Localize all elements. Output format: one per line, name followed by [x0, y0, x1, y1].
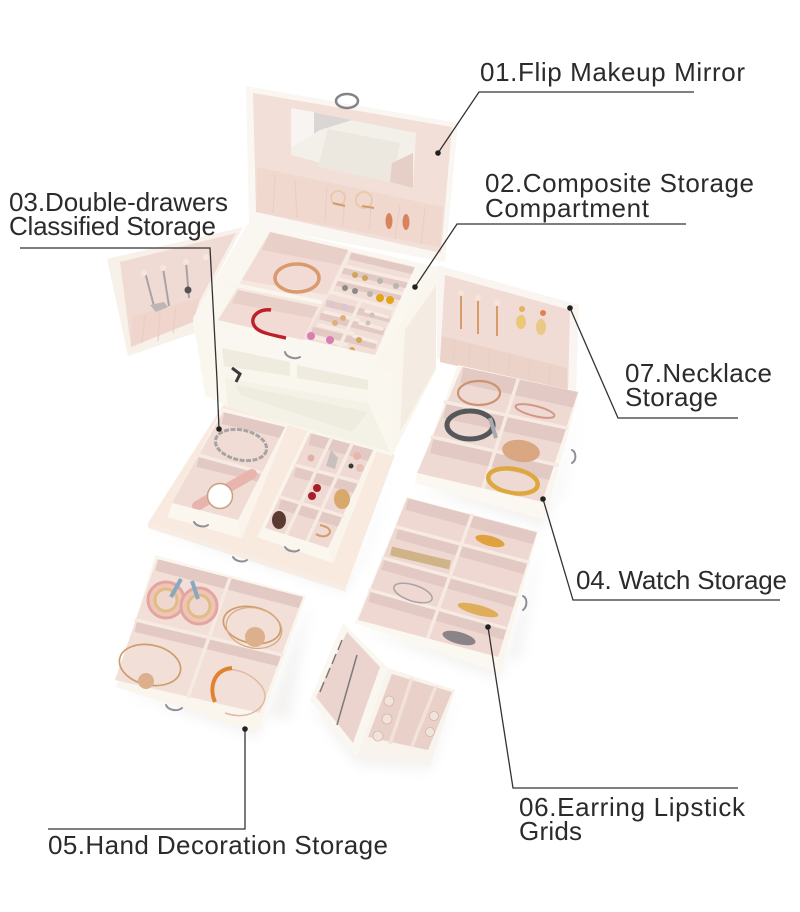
tray front	[415, 473, 545, 520]
tray front	[355, 620, 500, 673]
disc bangle bottom left	[116, 639, 184, 691]
grey watch	[447, 411, 496, 439]
earring lipstick box	[310, 623, 455, 765]
door hanging jewelry	[141, 254, 209, 312]
label 05 hand decoration storage	[48, 726, 388, 860]
label 02 composite storage compartment	[412, 168, 754, 290]
label 01 flip makeup mirror: 01.Flip Makeup Mirror	[480, 57, 745, 87]
pink strap watch	[197, 474, 252, 508]
left small drawer: watch storage	[167, 408, 288, 538]
pocket earrings	[331, 191, 410, 230]
red bracelet compartment	[218, 290, 318, 340]
soft shadows under the trays	[120, 400, 580, 770]
tray 05: four compartment hand decoration tray	[115, 555, 306, 733]
tray 04: six compartment watch tray	[415, 365, 579, 520]
lid clasp	[336, 94, 358, 108]
right door: necklace storage panel	[437, 265, 579, 392]
door pleated pocket	[131, 298, 200, 347]
bangle	[458, 381, 500, 405]
tray handle	[572, 450, 575, 463]
label 07 necklace storage: Storage	[625, 382, 718, 412]
small drawer front	[168, 503, 240, 538]
open cavity	[225, 378, 390, 452]
upper shelf slots	[222, 348, 290, 376]
label 05 hand decoration storage: 05.Hand Decoration Storage	[48, 830, 388, 860]
pearl earrings	[373, 696, 438, 741]
drawer front	[257, 528, 333, 563]
gold disc	[501, 437, 541, 465]
label 06 earring lipstick grids: 06.Earring Lipstick	[519, 792, 746, 822]
earring and ring grid	[303, 252, 415, 355]
leaf pin	[441, 628, 477, 648]
silver bangle	[392, 579, 434, 607]
lid pleated pocket	[256, 167, 443, 247]
mirror	[291, 108, 416, 188]
tray handle	[523, 596, 526, 610]
white strap	[220, 282, 320, 302]
label 02 composite storage compartment: Compartment	[485, 193, 650, 223]
silver bracelet	[212, 425, 270, 465]
left door: necklace hooks panel	[107, 227, 243, 356]
label 07 necklace storage	[567, 305, 772, 418]
lid hanging pieces	[320, 640, 357, 725]
door hanging earrings	[458, 290, 546, 336]
round drop earrings	[148, 579, 217, 624]
label 01 flip makeup mirror	[435, 57, 745, 156]
label 03 double drawers classified storage	[9, 187, 228, 432]
base drawer with pink lining	[148, 402, 395, 592]
door pleated pocket	[440, 336, 567, 392]
base drawer handle	[233, 557, 247, 561]
disc bangle top right	[220, 601, 286, 653]
flower brooch	[456, 600, 500, 620]
label 03 double drawers classified storage: 03.Double-drawers	[9, 187, 228, 217]
crystal hair clip	[391, 551, 450, 565]
gold brooch	[474, 532, 506, 550]
pink bracelet	[514, 401, 556, 421]
label 04 watch storage	[540, 496, 787, 600]
earring items	[272, 450, 364, 536]
orange resin bangle	[212, 670, 265, 715]
box body	[357, 668, 455, 765]
mid tray: eight compartment lipstick tray	[355, 497, 538, 673]
tray handle	[166, 705, 182, 710]
label 03 double drawers classified storage: Classified Storage	[9, 211, 216, 241]
drawer front with handle	[217, 322, 372, 380]
grid drawer with nine compartments	[257, 430, 378, 563]
large bangle compartment	[242, 232, 348, 295]
label 04 watch storage: 04. Watch Storage	[576, 565, 787, 595]
main box right side wall	[372, 267, 437, 456]
gold bangle	[486, 465, 540, 497]
label 06 earring lipstick grids: Grids	[519, 816, 582, 846]
label 07 necklace storage: 07.Necklace	[625, 358, 772, 388]
dark strap in cavity	[232, 368, 240, 382]
stud earrings	[307, 272, 399, 353]
label 06 earring lipstick grids	[485, 624, 746, 846]
lid with flip makeup mirror	[246, 86, 458, 262]
label 02 composite storage compartment: 02.Composite Storage	[485, 168, 754, 198]
main box front with shelves	[193, 318, 393, 456]
